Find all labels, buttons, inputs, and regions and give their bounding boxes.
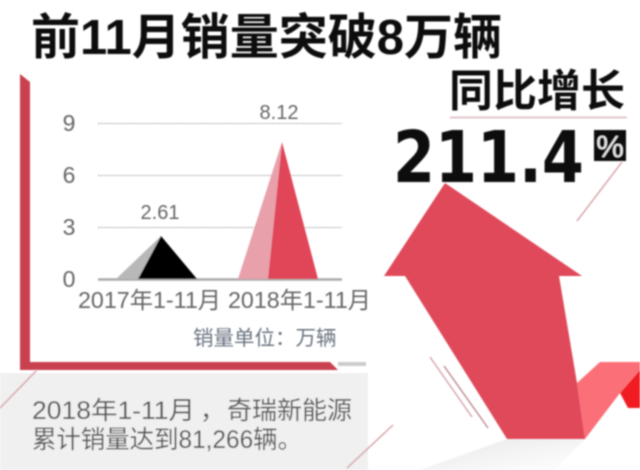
value labels: 8.12	[260, 102, 298, 124]
subheading: year-on-year growth: 同比增长	[449, 67, 625, 116]
bar 2018	[238, 142, 318, 279]
title: 前11月销量突破8万辆	[31, 11, 502, 65]
x axis labels: 2018年1-11月	[228, 287, 371, 313]
note text: 累计销量达到81,266辆。	[32, 426, 302, 454]
value labels	[141, 102, 298, 224]
y axis labels: 3	[63, 214, 75, 240]
arrow shadow	[420, 439, 585, 470]
unit label: 销量单位：万辆	[193, 327, 336, 350]
y axis labels: 9	[63, 110, 75, 136]
x axis labels	[78, 287, 371, 313]
y axis labels	[63, 110, 75, 292]
y axis labels: 0	[63, 266, 75, 292]
panel: text note	[0, 373, 368, 470]
note text: ，	[200, 397, 225, 425]
y axis labels: 6	[63, 162, 75, 188]
accent lines	[0, 162, 622, 468]
note text: 奇瑞新能源	[227, 397, 352, 425]
x axis labels: 2017年1-11月	[78, 287, 221, 313]
percent badge: %	[596, 129, 624, 164]
note text	[32, 397, 352, 454]
big number: 211.4	[393, 116, 584, 199]
bar chart	[63, 102, 371, 350]
decorative frame: chart panel	[20, 74, 366, 370]
arrow: growth	[384, 183, 640, 439]
note text: 2018年1-11月	[32, 397, 195, 425]
bar 2017	[116, 236, 197, 279]
value labels: 2.61	[141, 202, 179, 224]
